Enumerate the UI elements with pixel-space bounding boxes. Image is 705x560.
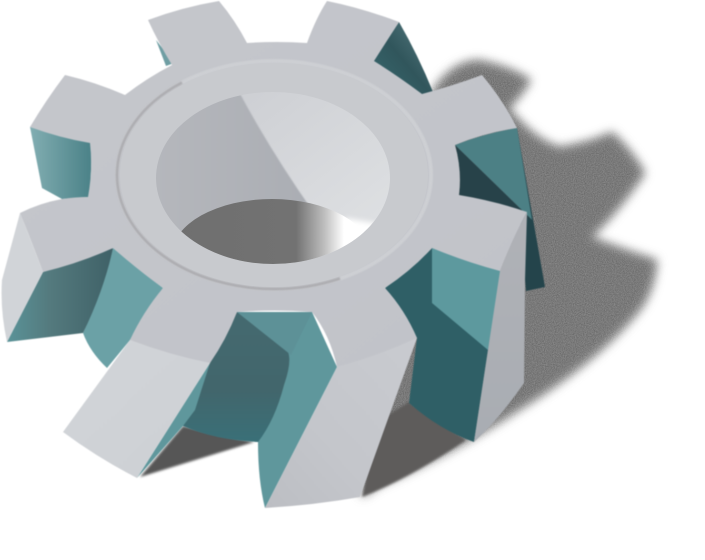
- teal wall behind tooth D: [517, 128, 545, 291]
- teal gap: between teeth F and E, base: [137, 312, 337, 508]
- teal gap: between teeth F and E, dark: [183, 312, 289, 442]
- teal gap: between teeth E and D, light: [432, 248, 502, 350]
- ring top surface: [120, 63, 428, 287]
- hole wall, lit: [256, 94, 390, 224]
- tooth side: F: [63, 340, 210, 478]
- teal gap: between teeth H and G: [30, 127, 92, 199]
- teal gap: between teeth G and F, light: [83, 248, 163, 368]
- tooth side: G: [2, 213, 43, 342]
- teal gap: tooth A sliver: [230, 17, 247, 44]
- ground seen through hole: [182, 199, 364, 264]
- ring groove shading: [117, 83, 340, 289]
- top face of gear: [20, 1, 527, 367]
- tooth side: D: [474, 212, 527, 442]
- shadow under lower left teeth: [140, 426, 254, 477]
- ring edge: [117, 61, 431, 289]
- teal gap: left of tooth A: [156, 40, 174, 66]
- tooth side: E: [265, 338, 417, 508]
- teal gap: between teeth E and D, dark: [385, 248, 500, 442]
- cast shadow on ground: [340, 60, 657, 497]
- teal gap: between teeth C and D, light: [455, 128, 532, 220]
- centre hole: [156, 94, 390, 264]
- raised ring on face: [117, 61, 431, 289]
- teal gap: between teeth C and D, dark: [455, 145, 532, 220]
- hole wall, shaded: [156, 96, 308, 232]
- ground bright corner: [347, 217, 374, 242]
- teal gap: between teeth F and E, top light: [237, 312, 312, 355]
- shadow under lower right teeth: [362, 402, 466, 497]
- teal gap: between teeth B and C: [372, 22, 433, 96]
- teal gap: between teeth G and F, dark: [7, 248, 113, 342]
